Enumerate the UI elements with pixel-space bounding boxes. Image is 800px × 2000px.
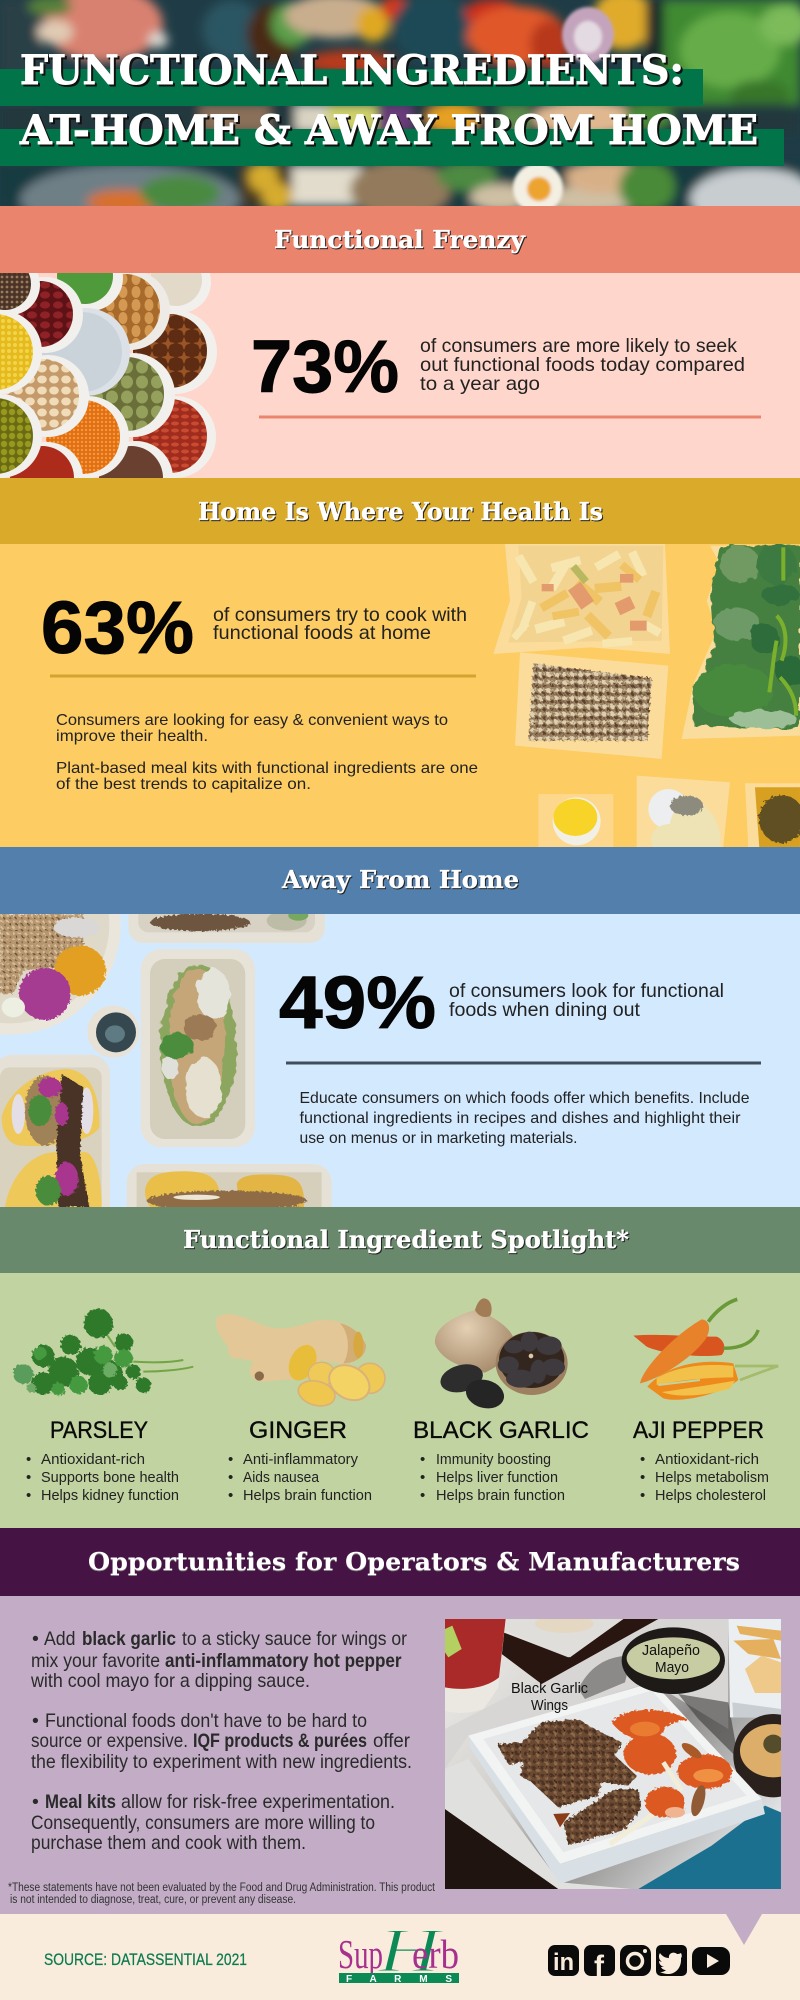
section band bbox=[0, 206, 800, 273]
benefits list: • bbox=[420, 1469, 425, 1486]
benefits list: • bbox=[640, 1451, 645, 1468]
icon: instagram bbox=[620, 1945, 651, 1976]
tip: black garlic sauce: mix your favorite bbox=[31, 1650, 160, 1672]
section background bbox=[0, 273, 800, 478]
panel: opportunities bbox=[0, 1528, 800, 1914]
benefits list: • bbox=[640, 1469, 645, 1486]
body text: improve their health. bbox=[56, 728, 208, 745]
benefits list: Helps cholesterol bbox=[655, 1487, 766, 1504]
panel: away from home bbox=[0, 847, 800, 1207]
heading: Home Is Where Your Health Is bbox=[198, 497, 603, 526]
benefits list: Helps metabolism bbox=[655, 1469, 769, 1486]
tip: iqf products: source or expensive. bbox=[31, 1730, 188, 1752]
benefits list: Antioxidant-rich bbox=[41, 1451, 145, 1468]
takeout food image bbox=[0, 914, 332, 1207]
stat description bbox=[449, 980, 724, 1021]
logo: SupHerb Farms: erb bbox=[412, 1931, 459, 1977]
title bar 2 bbox=[0, 129, 784, 166]
icon: parsley bbox=[13, 1309, 193, 1396]
section band bbox=[0, 847, 800, 914]
stat description bbox=[420, 335, 745, 395]
tip: black garlic sauce: to a sticky sauce for wings or bbox=[182, 1628, 407, 1650]
benefits list: • bbox=[26, 1469, 31, 1486]
body text bbox=[56, 712, 478, 793]
benefits list: Helps kidney function bbox=[41, 1487, 179, 1504]
benefits list: Supports bone health bbox=[41, 1469, 179, 1486]
photo label: black garlic wings bbox=[511, 1680, 588, 1714]
hero food photo background bbox=[0, 0, 800, 206]
section background bbox=[0, 1596, 800, 1914]
title bbox=[19, 47, 758, 154]
callout pointer bbox=[726, 1914, 762, 1945]
footer background bbox=[0, 1914, 800, 2000]
panel: functional frenzy bbox=[0, 206, 800, 478]
stat description bbox=[213, 604, 467, 644]
tip: black garlic sauce: black garlic bbox=[82, 1628, 176, 1650]
heading: Away From Home bbox=[281, 865, 519, 894]
section band bbox=[0, 1207, 800, 1273]
tip: black garlic sauce bbox=[30, 1628, 407, 1692]
photo label: black garlic wings: Wings bbox=[531, 1697, 568, 1714]
benefits list bbox=[420, 1451, 565, 1504]
heading: Opportunities for Operators & Manufacturers bbox=[88, 1547, 740, 1576]
tip: black garlic sauce: • bbox=[32, 1628, 39, 1650]
stat description: out functional foods today compared bbox=[420, 354, 745, 376]
icon: facebook: f bbox=[594, 1950, 605, 1983]
stat: 49%: 49% bbox=[279, 961, 436, 1044]
benefits list: Antioxidant-rich bbox=[655, 1451, 759, 1468]
icon: black garlic bbox=[435, 1298, 568, 1413]
stat description: of consumers look for functional bbox=[449, 980, 724, 1002]
stat description: functional foods at home bbox=[213, 622, 431, 644]
photo label: jalapeño mayo: Mayo bbox=[655, 1659, 689, 1676]
tip: meal kits: purchase them and cook with them. bbox=[31, 1832, 306, 1854]
tip: meal kits: Consequently, consumers are more willing to bbox=[31, 1812, 375, 1834]
logo: SupHerb Farms: F A R M S bbox=[346, 1974, 452, 1985]
logo: SupHerb Farms bbox=[338, 1917, 459, 1985]
name: BLACK GARLIC bbox=[413, 1417, 589, 1444]
icon: aji pepper bbox=[633, 1299, 778, 1400]
section band bbox=[0, 1528, 800, 1596]
body text bbox=[300, 1090, 750, 1147]
photo label: black garlic wings: Black Garlic bbox=[511, 1680, 588, 1697]
section background bbox=[0, 544, 800, 847]
meal kit bags image bbox=[493, 544, 800, 847]
icon: linkedin: in bbox=[553, 1949, 574, 1976]
heading: Functional Frenzy bbox=[274, 225, 526, 254]
icon: twitter bbox=[656, 1945, 687, 1976]
benefits list: • bbox=[228, 1487, 233, 1504]
benefits list: • bbox=[26, 1451, 31, 1468]
title bar 1 bbox=[0, 69, 703, 106]
footnote: *These statements have not been evaluated by the Food and Drug Administration. This product bbox=[8, 1882, 436, 1894]
tip: iqf products: Functional foods don't have to be hard to bbox=[45, 1710, 367, 1732]
tip: meal kits bbox=[31, 1791, 395, 1854]
body text: Plant-based meal kits with functional ingredients are one bbox=[56, 760, 478, 777]
food photo bbox=[445, 1614, 800, 1889]
source: SOURCE: DATASSENTIAL 2021 bbox=[44, 1950, 247, 1969]
name: GINGER bbox=[249, 1417, 347, 1444]
tip: meal kits: allow for risk-free experimentation. bbox=[121, 1791, 395, 1813]
benefits list: Helps brain function bbox=[436, 1487, 565, 1504]
photo label: jalapeño mayo: Jalapeño bbox=[642, 1642, 700, 1659]
body text: Consumers are looking for easy & convenient ways to bbox=[56, 712, 448, 729]
benefits list: Helps liver function bbox=[436, 1469, 558, 1486]
icon: ginger bbox=[216, 1314, 385, 1410]
tip: meal kits: Meal kits bbox=[45, 1791, 116, 1813]
body text: use on menus or in marketing materials. bbox=[300, 1130, 578, 1147]
stat description: of consumers are more likely to seek bbox=[420, 335, 737, 357]
benefits list: Immunity boosting bbox=[436, 1451, 551, 1468]
panel: home is where your health is bbox=[0, 478, 800, 847]
section background bbox=[0, 914, 800, 1207]
tip: black garlic sauce: with cool mayo for a dipping sauce. bbox=[30, 1670, 310, 1692]
section background bbox=[0, 1273, 800, 1528]
benefits list: Anti-inflammatory bbox=[243, 1451, 358, 1468]
benefits list: Aids nausea bbox=[243, 1469, 320, 1486]
name: AJI PEPPER bbox=[633, 1417, 764, 1444]
ingredient: parsley bbox=[13, 1309, 193, 1504]
panel: functional ingredient spotlight bbox=[0, 1207, 800, 1528]
body text: functional ingredients in recipes and dishes and highlight their bbox=[300, 1110, 741, 1127]
tip: meal kits: • bbox=[32, 1791, 39, 1813]
logo: SupHerb Farms: H bbox=[377, 1917, 444, 1985]
icon: linkedin bbox=[548, 1945, 579, 1976]
name: PARSLEY bbox=[50, 1417, 148, 1444]
tip: black garlic sauce: anti-inflammatory hot pepper bbox=[165, 1650, 402, 1672]
stat description: foods when dining out bbox=[449, 999, 641, 1021]
title: AT-HOME & AWAY FROM HOME bbox=[19, 107, 758, 154]
panel: footer bbox=[0, 1914, 800, 2000]
tip: iqf products: • bbox=[32, 1710, 39, 1732]
footnote: is not intended to diagnose, treat, cure, or prevent any disease. bbox=[10, 1894, 296, 1906]
benefits list: • bbox=[26, 1487, 31, 1504]
stat description: of consumers try to cook with bbox=[213, 604, 467, 626]
benefits list bbox=[26, 1451, 179, 1504]
panel: hero header bbox=[0, 0, 800, 206]
benefits list bbox=[640, 1451, 769, 1504]
ingredient: ginger bbox=[216, 1314, 385, 1504]
benefits list: • bbox=[228, 1469, 233, 1486]
benefits list: • bbox=[640, 1487, 645, 1504]
tip: iqf products bbox=[31, 1710, 412, 1773]
stat: 73%: 73% bbox=[251, 325, 399, 408]
icon: youtube bbox=[692, 1947, 730, 1975]
stat: 63%: 63% bbox=[41, 586, 194, 669]
photo label: jalapeño mayo bbox=[642, 1642, 700, 1676]
benefits list: • bbox=[228, 1451, 233, 1468]
tip: iqf products: the flexibility to experiment with new ingredients. bbox=[31, 1751, 412, 1773]
ingredient: aji pepper bbox=[633, 1299, 778, 1504]
footnote bbox=[8, 1882, 436, 1906]
body text: of the best trends to capitalize on. bbox=[56, 776, 311, 793]
tip: black garlic sauce: Add bbox=[44, 1628, 76, 1650]
body text: Educate consumers on which foods offer which benefits. Include bbox=[300, 1090, 750, 1107]
section band bbox=[0, 478, 800, 544]
icon: facebook bbox=[584, 1945, 615, 1983]
tip: iqf products: IQF products & purées bbox=[193, 1730, 367, 1752]
ingredient: black garlic bbox=[413, 1298, 589, 1504]
stat description: to a year ago bbox=[420, 373, 540, 395]
tip: iqf products: offer bbox=[373, 1730, 410, 1752]
heading: Functional Ingredient Spotlight* bbox=[183, 1225, 629, 1254]
spice bowls image bbox=[0, 273, 217, 478]
benefits list: • bbox=[420, 1487, 425, 1504]
benefits list: • bbox=[420, 1451, 425, 1468]
title: FUNCTIONAL INGREDIENTS: bbox=[20, 47, 684, 94]
benefits list bbox=[228, 1451, 372, 1504]
logo: SupHerb Farms: Sup bbox=[338, 1931, 383, 1977]
benefits list: Helps brain function bbox=[243, 1487, 372, 1504]
